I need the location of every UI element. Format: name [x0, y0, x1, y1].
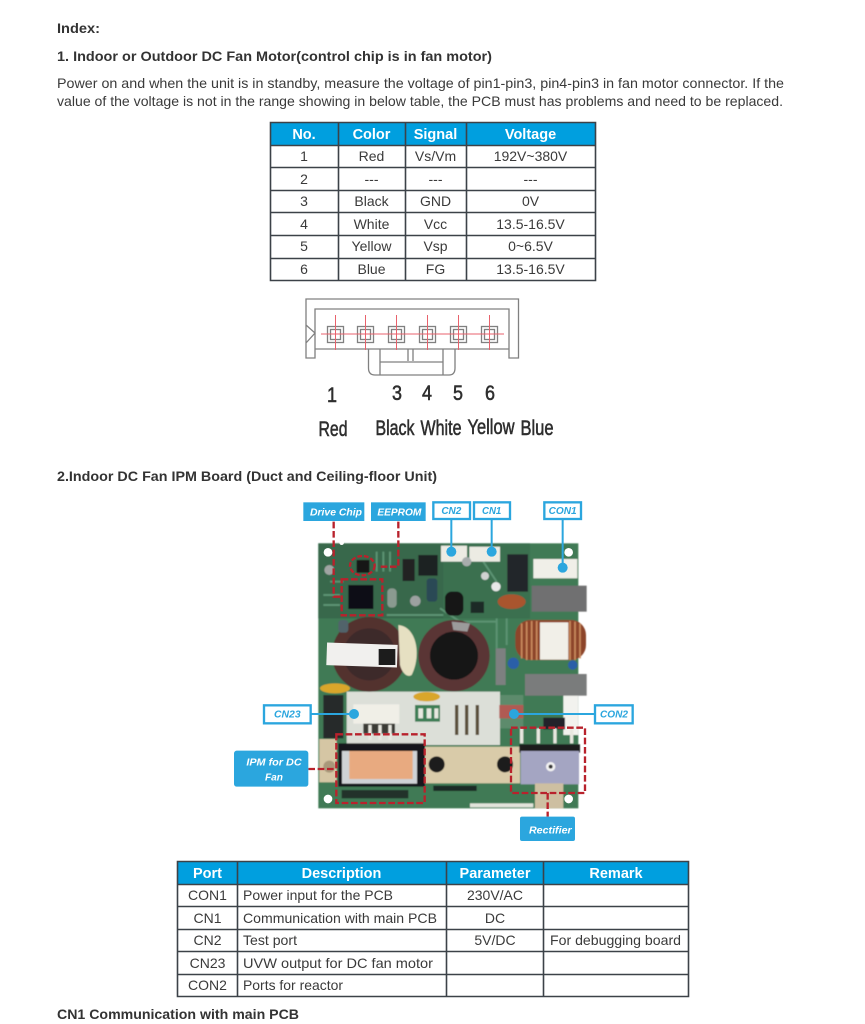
table: fan motor pin voltages: 4 [300, 216, 308, 232]
pin numbers: 6 [485, 382, 495, 405]
table: fan motor pin voltages: 5 [300, 238, 308, 254]
left black connector [323, 695, 343, 738]
label: IPM for DC Fan: Fan [265, 773, 283, 784]
pin numbers: 5 [453, 382, 463, 405]
label: CN1 [474, 502, 510, 519]
table: fan motor pin voltages: Yellow [352, 238, 392, 254]
table: port descriptions: Parameter [460, 866, 531, 882]
table: fan motor pin voltages: Vcc [424, 216, 447, 232]
wire colour labels: Black [376, 417, 415, 440]
heading: section 2: 2.Indoor DC Fan IPM Board (Duct and Ceiling-floor Unit) [57, 468, 437, 484]
x caps [532, 586, 587, 612]
table: port descriptions: UVW output for DC fan motor [243, 955, 433, 971]
CN23 connector [353, 704, 399, 724]
heading: section 1: 1. Indoor or Outdoor DC Fan Motor(control chip is in fan motor) [57, 48, 492, 64]
IPM module [338, 743, 425, 787]
table: port descriptions: 5V/DC [474, 932, 516, 948]
label: Drive Chip [303, 502, 364, 521]
pin numbers: 4 [422, 382, 432, 405]
label: CN23: CN23 [274, 710, 301, 721]
table: fan motor pin voltages: White [354, 216, 390, 232]
table: port descriptions: Communication with main PCB [243, 910, 437, 926]
table: fan motor pin voltages: 6 [300, 261, 308, 277]
table: port descriptions: Test port [243, 932, 297, 948]
table: fan motor pin voltages: 13.5-16.5V [496, 216, 565, 232]
table: port descriptions: CON1 [188, 887, 227, 903]
table: port descriptions: For debugging board [550, 932, 681, 948]
blue leader lines [311, 519, 595, 719]
table: fan motor pin voltages [270, 122, 596, 280]
text block: voltage measurement instructions: value of the voltage is not in the range showing in below table, the PCB must has problems and need to be replaced. [57, 93, 783, 109]
annotated PCB photo [234, 502, 633, 841]
table: fan motor pin voltages: Vs/Vm [415, 148, 456, 164]
beige base [319, 739, 337, 782]
pin numbers [327, 382, 495, 407]
table: port descriptions: DC [485, 910, 505, 926]
table: port descriptions: CN1 [193, 910, 222, 926]
chips [348, 585, 373, 609]
label: CON1 [544, 502, 581, 519]
table: port descriptions [178, 862, 688, 996]
label: CN2: CN2 [441, 506, 462, 517]
table: port descriptions: CN23 [190, 955, 226, 971]
rectifier [519, 744, 580, 753]
table: fan motor pin voltages: 1 [300, 148, 308, 164]
connector housing [306, 299, 518, 375]
mounting holes [324, 548, 573, 803]
label: CN23 [264, 705, 311, 723]
table: fan motor pin voltages: Signal [414, 127, 457, 143]
label: CN2 [433, 502, 470, 519]
small green pads [415, 705, 440, 722]
table: port descriptions: Description [302, 866, 381, 882]
CON2 connector [499, 705, 523, 718]
heading: CN1 communication: CN1 Communication with main PCB [57, 1006, 299, 1022]
table: port descriptions: Power input for the PCB [243, 887, 393, 903]
label: IPM for DC Fan: IPM for DC [246, 758, 303, 769]
table: port descriptions: Port [193, 866, 222, 882]
table: port descriptions: CON2 [188, 977, 227, 993]
board traces [323, 552, 507, 648]
heading: index: Index: [57, 20, 100, 36]
label: CON2: CON2 [600, 710, 628, 721]
components top [418, 555, 438, 576]
wire colour labels: White [420, 417, 462, 440]
table: fan motor pin voltages: Vsp [423, 238, 448, 254]
label: Rectifier: Rectifier [529, 826, 573, 837]
label: Drive Chip: Drive Chip [310, 507, 362, 518]
circuit board [318, 540, 587, 808]
notch [339, 540, 344, 545]
wire colour labels [318, 416, 554, 441]
caps large [332, 617, 407, 692]
table: fan motor pin voltages: 0V [522, 193, 540, 209]
label: Rectifier [520, 817, 575, 841]
table: fan motor pin voltages: Voltage [505, 127, 556, 143]
pin numbers: 3 [392, 382, 402, 405]
connector diagram: fan motor connector pins [306, 299, 554, 441]
table: port descriptions: 230V/AC [467, 887, 523, 903]
sticker [326, 642, 398, 668]
table: fan motor pin voltages: --- [364, 171, 379, 187]
label: CON2 [595, 705, 633, 723]
wire colour labels: Yellow [468, 416, 515, 439]
table: fan motor pin voltages: Blue [357, 261, 386, 277]
red dashed highlights [308, 522, 585, 817]
table: fan motor pin voltages: --- [524, 171, 538, 187]
label: IPM for DC Fan [234, 751, 308, 787]
table: fan motor pin voltages: --- [428, 171, 443, 187]
table: fan motor pin voltages: 3 [300, 193, 308, 209]
table: fan motor pin voltages: Red [359, 148, 384, 164]
table: fan motor pin voltages: Black [354, 193, 390, 209]
table: fan motor pin voltages: 0~6.5V [508, 238, 554, 254]
text block: voltage measurement instructions: Power on and when the unit is in standby, measure the voltage of pin1-pin3, pin4-pin3 in fan motor connector. If the [57, 75, 784, 91]
leads and bottom strip [370, 725, 572, 743]
wire colour labels: Red [318, 418, 348, 441]
wire colour labels: Blue [520, 417, 554, 440]
yellow caps [320, 683, 350, 693]
table: fan motor pin voltages: 192V~380V [494, 148, 568, 164]
pin numbers: 1 [327, 384, 337, 407]
table: fan motor pin voltages: FG [426, 261, 445, 277]
label: EEPROM: EEPROM [377, 507, 422, 518]
red pin guide lines [321, 315, 504, 350]
relay [507, 554, 528, 592]
table: fan motor pin voltages: 13.5-16.5V [496, 261, 565, 277]
table: port descriptions: Remark [589, 866, 644, 882]
table: port descriptions: CN2 [193, 932, 222, 948]
text block: voltage measurement instructions [57, 75, 784, 109]
table: fan motor pin voltages: Color [353, 127, 391, 143]
top connectors [441, 546, 467, 562]
coil [515, 620, 586, 660]
lower white silk area [347, 692, 500, 745]
label: CON1: CON1 [549, 506, 577, 517]
table: fan motor pin voltages: GND [420, 193, 451, 209]
table: fan motor pin voltages: No. [292, 127, 316, 143]
label: EEPROM [371, 502, 426, 521]
label: CN1: CN1 [482, 506, 502, 517]
table: port descriptions: Ports for reactor [243, 977, 343, 993]
table: fan motor pin voltages: 2 [300, 171, 308, 187]
